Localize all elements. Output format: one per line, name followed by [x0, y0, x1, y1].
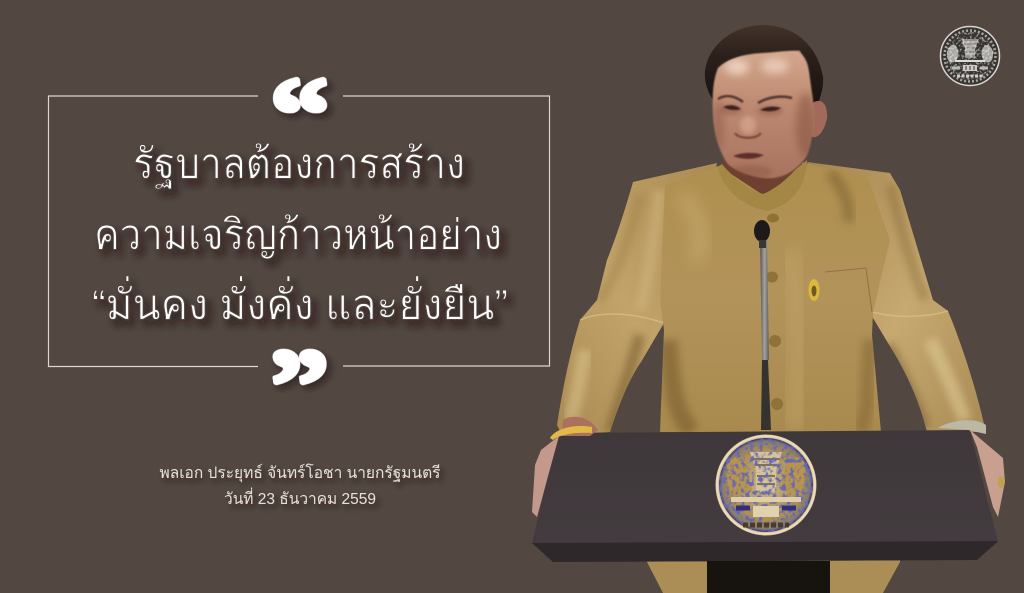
main quote text: “มั่นคง มั่งคั่ง และยั่งยืน”: [92, 276, 508, 328]
lapel pin: [808, 279, 820, 301]
attribution text: วันที่ 23 ธันวาคม 2559: [224, 487, 376, 508]
right sleeve: [807, 162, 984, 432]
person: presenter at podium: [532, 25, 1005, 593]
jacket buttons: [766, 214, 783, 410]
hands and cuffs: [532, 417, 1005, 517]
main quote text: ความเจริญก้าวหน้าอย่าง: [94, 211, 502, 259]
main quote text: รัฐบาลต้องการสร้าง: [133, 140, 465, 189]
collar: [718, 160, 807, 211]
attribution text: [160, 463, 441, 508]
icon: government seal: [940, 26, 1000, 86]
podium: [532, 430, 998, 562]
head: [705, 25, 827, 179]
jacket torso: [660, 162, 890, 432]
closing quotation mark: ”: [264, 329, 340, 443]
attribution text: พลเอก ประยุทธ์ จันทร์โอชา นายกรัฐมนตรี: [160, 463, 441, 483]
jacket hem below podium: [647, 555, 900, 593]
face: [713, 51, 814, 178]
quote frame: [48, 96, 550, 366]
eyes: [723, 105, 781, 111]
ear: [810, 101, 827, 137]
opening quotation mark: “: [264, 57, 340, 171]
eyebrows: [718, 96, 792, 103]
podium stand: [707, 561, 830, 593]
hair: [705, 25, 823, 112]
podium seal: [716, 434, 816, 536]
nose: [735, 133, 761, 138]
left sleeve: [557, 163, 717, 435]
main quote text: [92, 140, 508, 328]
neck: [722, 140, 808, 195]
microphone: [754, 220, 771, 430]
mouth: [733, 153, 764, 159]
